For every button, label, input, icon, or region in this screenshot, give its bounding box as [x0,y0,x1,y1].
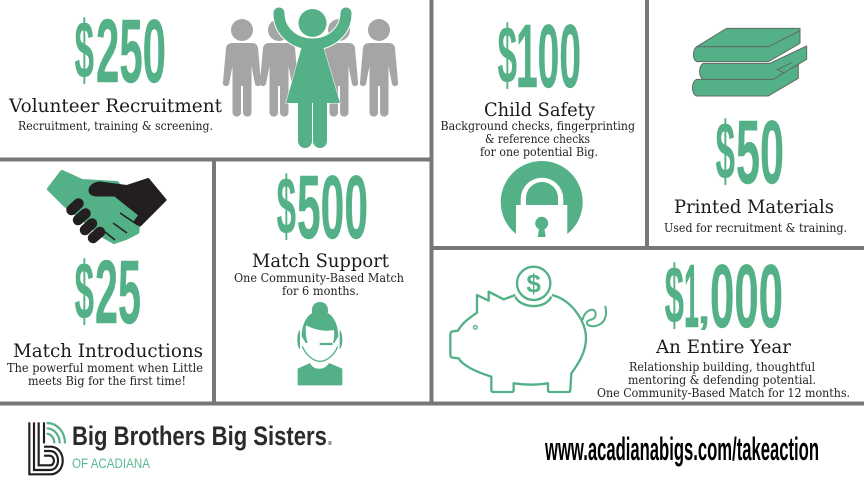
panel: an entire year: 000 [710,247,783,347]
amount: $1,000: , [698,284,710,333]
description: child safety: Background checks, fingerprinting [440,119,635,133]
panel: match introductions [7,172,203,388]
icon: logo mark [29,422,65,474]
amount: $50: $ [716,106,735,197]
panel: printed materials: 50 [736,103,784,203]
heading: Child Safety: Child Safety [484,99,595,121]
footer logo: Big Brothers Big Sisters of Acadiana [29,421,333,474]
heading: Match Introductions: Match Introductions [13,340,203,362]
description: match support [234,271,404,298]
icon: piggy bank with coin [450,267,606,392]
amount: $100: $ [498,10,517,101]
icon: dollar sign on coin: $ [526,269,541,299]
amount: $250: $ [74,5,94,96]
icon: stack of books [692,28,807,96]
heading: Match Support: Match Support [252,250,389,272]
description: child safety: & reference checks [485,132,590,146]
description: match support: One Community-Based Match [234,271,404,285]
panel: child safety [440,7,635,245]
amount: $1,000: 1 [684,247,699,347]
amount: $500 [276,158,368,258]
description: match introductions [7,361,203,388]
panel: match support [234,158,404,385]
heading: An Entire Year: An Entire Year [655,336,792,358]
amount: $1,000 [664,247,783,347]
icon: handshake [49,172,165,242]
panel: printed materials [664,28,847,235]
description: printed materials: Used for recruitment & training. [664,221,847,235]
amount: $1,000: $ [664,250,684,341]
amount: $25: $ [74,246,94,337]
description: child safety: for one potential Big. [480,145,598,159]
description: match support: for 6 months. [282,284,359,298]
logo wordmark: Big Brothers Big Sisters. [72,421,333,451]
description: an entire year: mentoring & defending potential. [628,373,816,387]
icon: support agent with headset [297,302,342,385]
panel: match introductions: 25 [95,243,141,343]
amount: $50 [716,103,784,203]
heading: Printed Materials: Printed Materials [674,196,834,218]
description: match introductions: The powerful moment when Little [7,361,203,375]
amount: $250 [74,2,166,102]
description: an entire year: One Community-Based Match for 12 months. [597,386,850,400]
icon: group of people with green raised-arms figure [223,9,398,148]
description: an entire year [597,360,850,400]
amount: $500: $ [276,161,296,252]
panel: child safety: 100 [516,7,581,107]
panel: an entire year [450,247,850,400]
heading: Volunteer Recruitment: Volunteer Recruitment [8,95,222,117]
description: match introductions: meets Big for the first time! [28,374,186,388]
description: child safety [440,119,635,159]
description: an entire year: Relationship building, thoughtful [629,360,815,374]
panel: volunteer recruitment [8,2,398,148]
icon: padlock [501,161,583,245]
description: volunteer recruitment: Recruitment, training & screening. [18,119,213,133]
panel: match support: 500 [297,158,368,258]
logo subtitle: OF ACADIANA [72,455,151,471]
amount: $25 [74,243,141,343]
panel: volunteer recruitment: 250 [96,2,166,102]
amount: $100 [498,7,581,107]
